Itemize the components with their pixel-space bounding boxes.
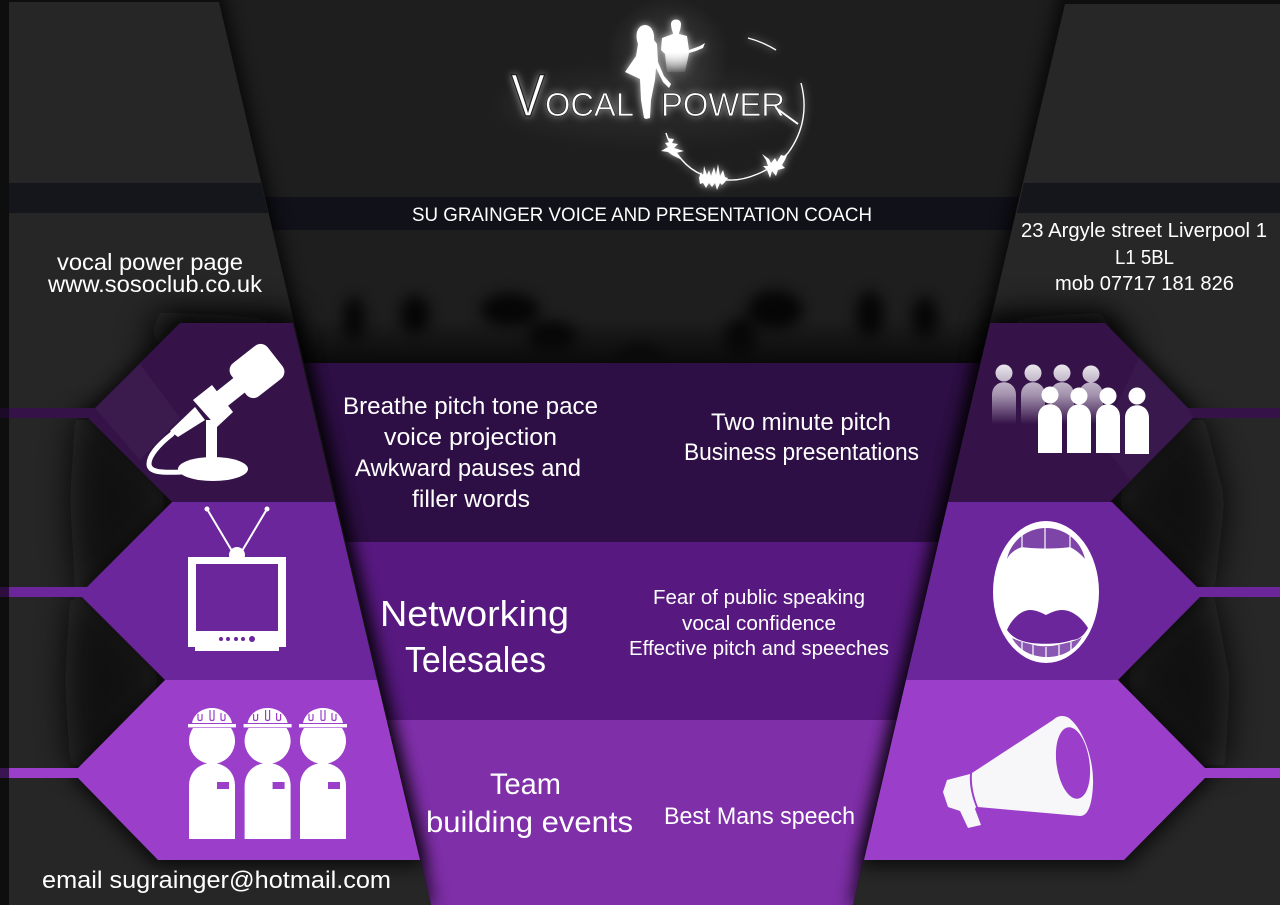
- chevron: row 2 left: [0, 502, 377, 680]
- text: row 2 left: [380, 593, 569, 680]
- text: row 2 left: Telesales: [405, 639, 546, 680]
- logo: wordmark: POWER: [661, 86, 785, 123]
- text: row 2 right: Fear of public speaking: [653, 586, 865, 609]
- chevron shadows: [75, 316, 1210, 866]
- text: row 1 right: Business presentations: [684, 439, 919, 466]
- panel: right column: [853, 0, 1280, 905]
- text: row 3 right: Best Mans speech: [664, 803, 855, 830]
- text: row 3 left: [426, 768, 633, 839]
- text: row 2 right: [629, 586, 889, 660]
- logo: wordmark: [511, 62, 798, 129]
- icon: audience group: [992, 364, 1149, 454]
- icon: megaphone: [943, 716, 1094, 828]
- chevron: row 3 left: [0, 680, 420, 860]
- text: website: www.sosoclub.co.uk: [47, 271, 262, 297]
- text: row 3 left: Team: [490, 768, 561, 801]
- panel: centre row 3: [200, 720, 1080, 905]
- logo: woman silhouette: [625, 25, 671, 119]
- logo: man silhouette: [661, 20, 705, 72]
- icon: microphone: [149, 340, 288, 481]
- text: address: L1 5BL: [1115, 246, 1174, 269]
- logo: wordmark: OCAL: [545, 86, 634, 123]
- text: row 2 right: vocal confidence: [682, 612, 836, 635]
- text: address: mob 07717 181 826: [1055, 272, 1234, 295]
- dark blurred reflection: [343, 290, 938, 405]
- text: row 2 right: Effective pitch and speeches: [629, 637, 889, 660]
- chevron: row 3 right: [864, 680, 1280, 860]
- left ribbon: [0, 183, 268, 213]
- logo: wordmark: V: [511, 62, 545, 129]
- text: row 1 left: Breathe pitch tone pace: [343, 393, 598, 420]
- text: row 3 left: building events: [426, 806, 633, 839]
- chevron: row 1 left: [0, 323, 335, 502]
- text: address: [1021, 219, 1267, 295]
- text: row 1 right: Two minute pitch: [711, 409, 891, 436]
- panel: centre row 1: [200, 363, 1080, 542]
- logo: circular sound arc: [661, 38, 804, 190]
- text: website: vocal power page: [57, 249, 243, 275]
- panel: left column: [0, 0, 431, 905]
- icon: television: [188, 506, 286, 651]
- left edge bar: [0, 0, 9, 905]
- side panel dark blotches: [65, 312, 1230, 765]
- panel: centre row 2: [200, 542, 1080, 720]
- text: row 2 left: Networking: [380, 593, 569, 634]
- text: email: email sugrainger@hotmail.com: [42, 867, 391, 894]
- logo: sound waves: [661, 138, 788, 190]
- text: row 1 left: [343, 393, 598, 513]
- subtitle ribbon: [200, 197, 1080, 230]
- icon: three workers in hard hats: [188, 708, 347, 839]
- logo: Vocal Power: [500, 0, 804, 190]
- text: address: 23 Argyle street Liverpool 1: [1021, 219, 1267, 242]
- right ribbon: [1017, 183, 1280, 213]
- text: row 1 left: filler words: [412, 486, 530, 513]
- icon: open mouth: [993, 521, 1099, 663]
- subtitle: SU GRAINGER VOICE AND PRESENTATION COACH: [412, 205, 872, 226]
- panel: centre column: [200, 0, 1080, 905]
- text: row 1 left: voice projection: [384, 424, 557, 451]
- text: website: [47, 249, 262, 297]
- text: row 1 right: [684, 409, 919, 466]
- chevron: row 1 right: [948, 323, 1280, 502]
- text: row 1 left: Awkward pauses and: [355, 455, 581, 482]
- chevron: row 2 right: [906, 502, 1280, 680]
